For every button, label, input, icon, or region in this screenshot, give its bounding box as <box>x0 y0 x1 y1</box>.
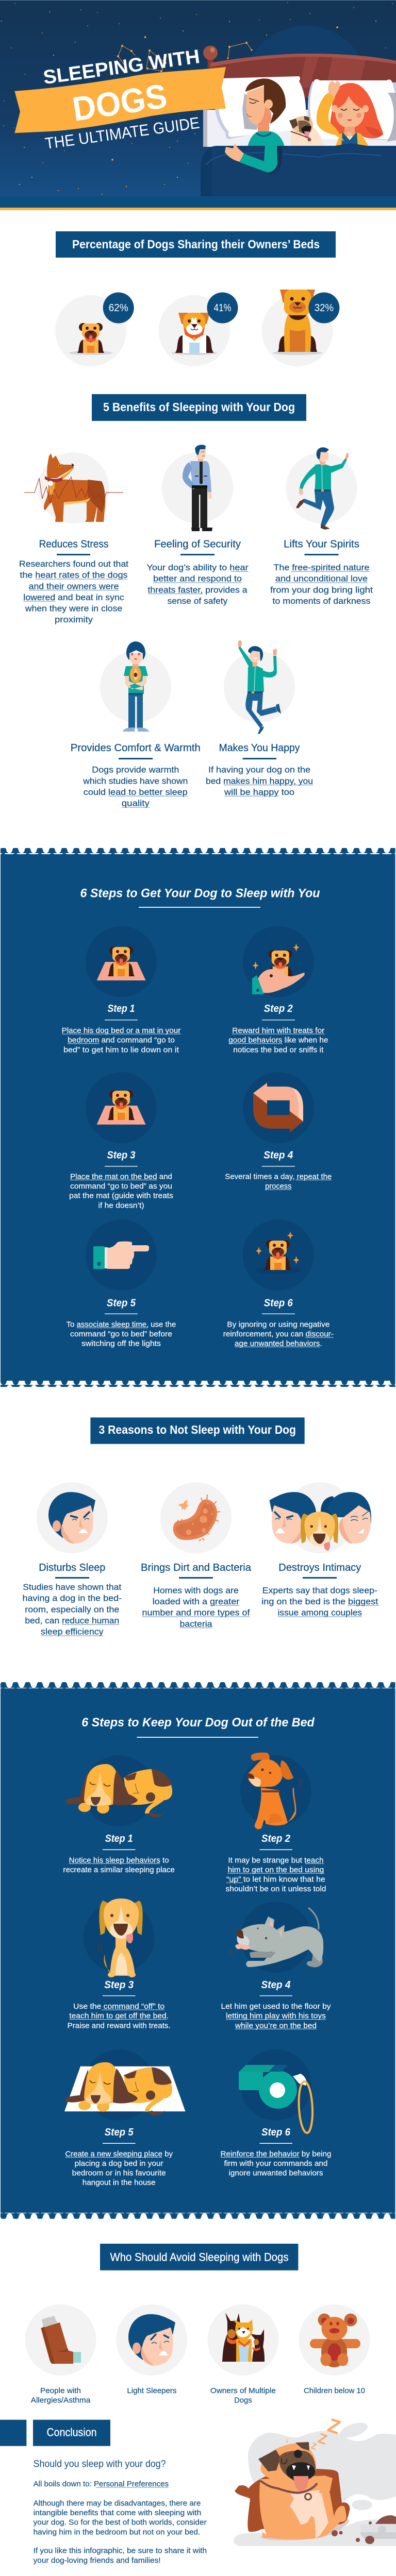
heading: 3 reasons: 3 Reasons to Not Sleep with Your Dog <box>99 1423 296 1436</box>
step 2: Reward him with treats for <box>232 1026 324 1035</box>
step 5: pointing hand: switching off the lights <box>81 1339 161 1348</box>
step 3: golden dog with tongue out: teach him to get off the bed. <box>69 2012 169 2021</box>
text block: number and more types of <box>142 1608 250 1618</box>
heading: percentage of dogs <box>56 231 336 258</box>
icon: tired face <box>128 2314 175 2366</box>
step 1: bedroom and command “go to <box>68 1036 175 1045</box>
step 2: orange dog looking up: shouldn’t be on it unless told <box>226 1885 326 1893</box>
step 5: beagle on a new bed: hangout in the house <box>82 2178 155 2187</box>
panel: 6 steps to keep your dog out of the bed <box>0 1682 396 2219</box>
text block: Homes with dogs are <box>153 1585 239 1595</box>
header: night sky, title and bed scene <box>0 0 396 210</box>
step 4: repeat arrows: Several times a day, repeat the <box>225 1172 332 1181</box>
conclusion text: All boils down to: Personal Preferences <box>34 2480 169 2488</box>
text block: If having your dog on the <box>208 765 310 775</box>
snore letters: Z <box>316 2430 329 2448</box>
icon: annoyed man <box>37 1482 108 1553</box>
stat 62% small pug: 62% <box>109 302 128 314</box>
step 1: Place his dog bed or a mat in your <box>62 1026 180 1035</box>
step 3: golden dog with tongue out: Praise and reward with treats. <box>68 2021 171 2030</box>
text block <box>82 765 188 808</box>
title: Destroys Intimacy <box>278 1562 361 1573</box>
step 5: pointing hand: To associate sleep time, use the <box>67 1320 176 1329</box>
text block <box>206 765 313 797</box>
step 5: pointing hand <box>67 1219 176 1348</box>
step 3: pat the mat (guide with treats <box>69 1192 173 1200</box>
step 1: sleeping beagle <box>63 1755 175 1874</box>
text block: better and respond to <box>153 574 242 584</box>
text block: and their owners were <box>29 581 119 591</box>
step 3: golden dog with tongue out <box>68 1899 171 2030</box>
text block <box>261 1585 378 1618</box>
stars <box>1 2 393 195</box>
step 3: golden dog with tongue out: Use the command “off” to <box>73 2002 164 2011</box>
panel: owners of multiple dogs: Owners of Multiple <box>210 2386 276 2395</box>
text block: sense of safety <box>168 596 228 606</box>
step 1: sleeping beagle: Step 1 <box>105 1833 133 1844</box>
step 4: playful gray dog: letting him play with his toys <box>226 2012 326 2021</box>
icon: security guard <box>162 445 233 531</box>
conclusion text: your dog-loving friends and families! <box>34 2556 161 2565</box>
step 6: age unwanted behaviors. <box>235 1339 322 1348</box>
conclusion text: Although there may be disadvantages, there are <box>34 2499 201 2507</box>
panel: benefit lifts your spirits <box>270 447 373 606</box>
text block: The free-spirited nature <box>273 563 369 572</box>
step 4: playful gray dog: while you’re on the bed <box>235 2021 317 2030</box>
title text: DOGS <box>70 76 170 128</box>
title: Brings Dirt and Bacteria <box>141 1562 252 1573</box>
title: Feeling of Security <box>154 539 241 550</box>
title text <box>42 46 201 152</box>
step 4: repeat arrows: Step 4 <box>263 1149 293 1161</box>
text block: loaded with a greater <box>153 1597 240 1606</box>
text block: room, especially on the <box>25 1604 119 1614</box>
step 3: if he doesn’t) <box>98 1201 144 1210</box>
step 6: By ignoring or using negative <box>227 1320 329 1329</box>
text block: which studies have shown <box>82 776 188 786</box>
step 4: playful gray dog: Let him get used to the floor by <box>221 2002 331 2011</box>
text block: when they were in close <box>25 604 122 614</box>
step 5: beagle on a new bed: placing a dog bed in your <box>75 2159 163 2168</box>
text block: lowered and beat in sync <box>23 592 124 602</box>
step 5: pointing hand: command “go to bed” before <box>70 1330 172 1338</box>
icon: dog with heartbeat <box>24 452 123 523</box>
pug in bed <box>289 116 325 147</box>
icon: three dogs <box>222 2313 265 2362</box>
text block: Dogs provide warmth <box>92 765 179 775</box>
man's arm over blanket <box>225 143 283 175</box>
text block <box>142 1585 250 1629</box>
title banner ribbon <box>14 67 226 133</box>
step 1 <box>62 926 181 1054</box>
text block: from your dog bring light <box>270 585 373 595</box>
step 2: orange dog looking up: Step 2 <box>261 1833 290 1844</box>
step 1: sleeping beagle: Notice his sleep behaviors to <box>69 1856 169 1865</box>
icon: annoyed couple with dog between them <box>269 1482 371 1553</box>
step 6: whistle <box>221 2049 331 2177</box>
step 2: orange dog looking up <box>226 1753 326 1893</box>
step 6: Step 6 <box>264 1297 293 1309</box>
step 6: whistle: firm with your commands and <box>224 2159 328 2168</box>
moon dome behind the headboard <box>243 26 369 151</box>
text block <box>270 563 373 606</box>
text block: the heart rates of the dogs <box>20 570 128 580</box>
pillow <box>235 2468 350 2532</box>
step 6: reinforcement, you can discour- <box>223 1330 334 1338</box>
panel: light sleepers: Light Sleepers <box>127 2386 176 2395</box>
step 6 <box>223 1219 334 1348</box>
icon: inhaler <box>41 2316 81 2364</box>
text block <box>23 1582 122 1637</box>
dog head <box>260 2443 316 2482</box>
step 6: whistle: Reinforce the behavior by being <box>221 2149 331 2158</box>
text block: issue among couples <box>277 1608 362 1618</box>
section title: 6 Steps to Get Your Dog to Sleep with You <box>80 887 320 901</box>
title: Provides Comfort & Warmth <box>71 742 201 754</box>
blanket <box>201 143 396 196</box>
panel: children below 10: Children below 10 <box>304 2386 365 2395</box>
conclusion heading <box>0 2420 110 2446</box>
step 1: Step 1 <box>107 1003 135 1014</box>
panel: owners of multiple dogs <box>207 2304 278 2405</box>
food bowl <box>360 2524 396 2536</box>
step 5: beagle on a new bed: Step 5 <box>105 2127 134 2138</box>
heading: 5 benefits: 5 Benefits of Sleeping with Your Dog <box>103 400 295 414</box>
text block: will be happy too <box>224 787 294 797</box>
icon: person hugging dog <box>100 641 171 732</box>
step 5: beagle on a new bed: bedroom or in his favourite <box>72 2168 166 2177</box>
step 2 <box>228 926 328 1054</box>
text block: and unconditional love <box>275 574 368 584</box>
dog body <box>259 2476 346 2539</box>
panel: owners of multiple dogs: Dogs <box>234 2396 252 2405</box>
panel: 6 steps to get your dog to sleep with you <box>0 848 396 1387</box>
title: Lifts Your Spirits <box>284 539 359 550</box>
section title: 6 Steps to Keep Your Dog Out of the Bed <box>81 1716 315 1730</box>
snore letters <box>310 2415 343 2452</box>
step 5: beagle on a new bed <box>64 2049 186 2187</box>
stat 32% large dog: 32% <box>315 302 334 314</box>
step 5: beagle on a new bed: Create a new sleeping place by <box>65 2149 173 2158</box>
panel: light sleepers <box>116 2304 187 2395</box>
step 4: playful gray dog <box>221 1902 331 2030</box>
step 2: orange dog looking up: It may be strange but teach <box>228 1856 324 1865</box>
conclusion heading: Conclusion <box>46 2426 97 2439</box>
step 1: bed” to get him to lie down on it <box>63 1045 179 1054</box>
panel: people with allergies: People with <box>40 2386 81 2395</box>
text block: quality <box>122 799 150 808</box>
panel: benefit feeling of security <box>146 445 249 606</box>
panel: people with allergies <box>25 2304 96 2405</box>
step 2: orange dog looking up: him to get on the bed using <box>228 1866 324 1874</box>
constellations <box>117 42 253 72</box>
conclusion text: having him in the bedroom but not on your bed. <box>34 2528 200 2536</box>
sleeping man <box>242 78 286 147</box>
title text: THE ULTIMATE GUIDE <box>44 114 201 152</box>
illustration: pug snoring on pillow <box>234 2415 396 2546</box>
snore letters: Z <box>325 2415 343 2439</box>
step 3: command “go to bed” as you <box>70 1182 172 1191</box>
step 4: playful gray dog: Step 4 <box>261 1979 291 1991</box>
step 1: sleeping beagle: recreate a similar sleeping place <box>63 1866 175 1874</box>
step 4: repeat arrows: process <box>265 1182 292 1191</box>
panel: benefit reduces stress <box>19 452 128 624</box>
heading: 3 reasons <box>90 1417 305 1444</box>
step 4: repeat arrows <box>225 1072 332 1191</box>
conclusion text: your dog. So for the best of both worlds, consider <box>34 2518 207 2527</box>
panel: reason destroys intimacy <box>261 1482 378 1618</box>
step 2: notices the bed or sniffs it <box>233 1045 324 1054</box>
title: Makes You Happy <box>219 742 300 754</box>
stat 62% small pug <box>55 293 134 366</box>
panel: percentage stats <box>55 290 339 366</box>
panel: people with allergies: Allergies/Asthma <box>31 2396 91 2405</box>
conclusion text: intangible benefits that come with sleeping with <box>34 2509 201 2517</box>
panel: reason disturbs sleep <box>23 1482 122 1637</box>
text block <box>146 563 249 606</box>
panel: benefit provides comfort and warmth <box>71 641 201 808</box>
conclusion text: If you like this infographic, be sure to share it with <box>34 2547 207 2555</box>
text block: sleep efficiency <box>41 1627 104 1637</box>
text block <box>19 559 128 624</box>
stat 41% medium dog: 41% <box>213 302 232 314</box>
text block: could lead to better sleep <box>84 787 188 797</box>
step 3: Step 3 <box>107 1149 135 1161</box>
text block: bacteria <box>179 1619 212 1629</box>
step 6: whistle: ignore unwanted behaviors <box>229 2168 323 2177</box>
title: Disturbs Sleep <box>39 1562 105 1573</box>
waking woman <box>317 80 383 147</box>
heading: who should avoid <box>100 2244 298 2270</box>
text block: ing on the bed is the biggest <box>261 1597 378 1606</box>
snore letters: Z <box>310 2441 318 2452</box>
conclusion text: Should you sleep with your dog? <box>34 2459 166 2469</box>
step 5: pointing hand: Step 5 <box>107 1297 136 1309</box>
text block: threats faster, provides a <box>147 585 248 595</box>
icon: cheerful man <box>286 447 357 530</box>
heading: 5 benefits <box>92 394 306 421</box>
icon: jumping man <box>224 640 295 734</box>
step 3: golden dog with tongue out: Step 3 <box>104 1979 134 1991</box>
panel: reason brings dirt and bacteria <box>141 1482 252 1629</box>
stat 41% medium dog <box>159 293 238 366</box>
heading: percentage of dogs: Percentage of Dogs Sharing their Owners’ Beds <box>72 238 320 251</box>
icon: teddy bear <box>310 2313 360 2367</box>
text block: bed, can reduce human <box>25 1616 119 1625</box>
text block: having a dog in the bed- <box>23 1594 122 1603</box>
icon: bacteria <box>160 1482 232 1553</box>
step 2: Step 2 <box>264 1003 293 1014</box>
title: Reduces Stress <box>39 539 108 550</box>
step 2: good behaviors like when he <box>228 1036 328 1045</box>
text block: Experts say that dogs sleep- <box>262 1585 377 1595</box>
headboard <box>203 45 396 98</box>
step 6: whistle: Step 6 <box>261 2127 291 2138</box>
title text: SLEEPING WITH <box>42 46 201 89</box>
text block: Researchers found out that <box>19 559 128 569</box>
stat 32% large dog <box>262 290 339 366</box>
step 3 <box>69 1072 173 1210</box>
panel: children below 10 <box>299 2304 370 2395</box>
conclusion text <box>34 2459 207 2565</box>
text block: Studies have shown that <box>23 1582 122 1592</box>
text block: to moments of darkness <box>272 596 370 606</box>
text block: Your dog’s ability to hear <box>146 563 249 572</box>
text block: proximity <box>55 615 93 624</box>
step 3: Place the mat on the bed and <box>70 1172 172 1181</box>
step 2: orange dog looking up: “up” to let him know that he <box>226 1875 325 1884</box>
sheet and pillows <box>203 76 396 147</box>
panel: benefit makes you happy <box>206 640 313 797</box>
heading: who should avoid: Who Should Avoid Sleeping with Dogs <box>110 2250 289 2263</box>
text block: bed makes him happy, you <box>206 776 313 786</box>
